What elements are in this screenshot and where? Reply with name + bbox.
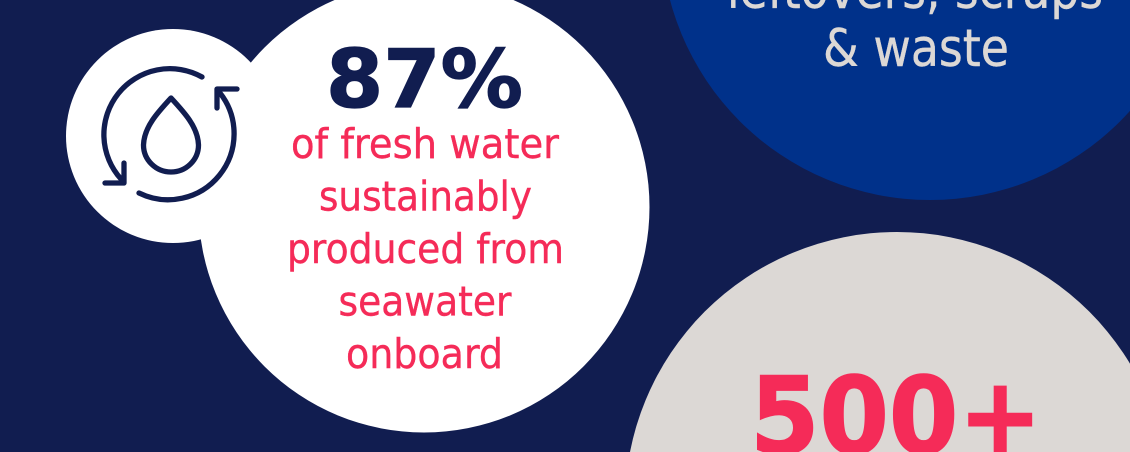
text: fresh water description: onboard	[346, 330, 503, 378]
icon: water recycling	[104, 69, 237, 200]
text: fresh water description: seawater	[338, 278, 512, 326]
text: fresh water description	[287, 120, 564, 378]
text: fresh water description: produced from	[287, 225, 564, 273]
statistic: 87%: 87%	[326, 33, 523, 126]
text: fresh water description: sustainably	[319, 172, 532, 220]
panel: icon circle	[66, 29, 280, 243]
panel: food waste circle	[661, 0, 1130, 200]
panel: fresh water circle	[66, 0, 650, 432]
text: leftovers, scraps and waste: & waste	[823, 19, 1009, 79]
text: leftovers, scraps and waste	[727, 0, 1103, 79]
text: fresh water description: of fresh water	[291, 120, 559, 168]
